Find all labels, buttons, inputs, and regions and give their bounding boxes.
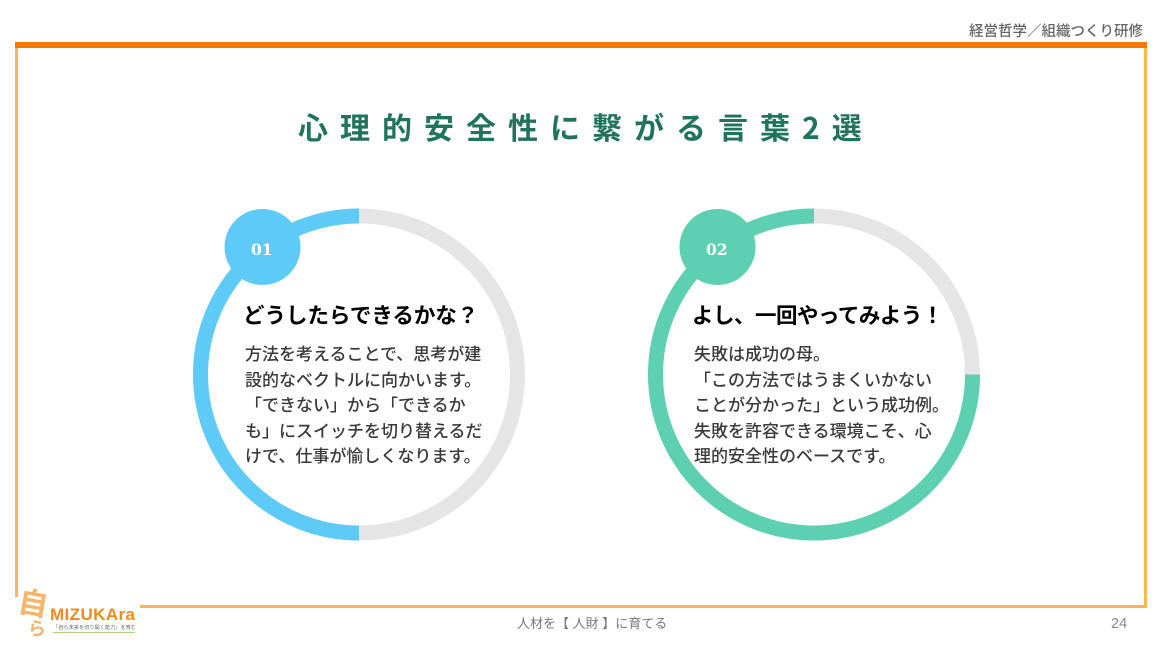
heading 02: よし、一回やってみよう！ [692, 304, 943, 328]
page number: 24 [1111, 616, 1127, 632]
logo [14, 597, 140, 643]
ring chart 01 [193, 208, 525, 540]
body text 01 [245, 345, 482, 466]
logo mark: 自 [15, 586, 51, 623]
number 01: 01 [251, 240, 273, 259]
top orange bar [15, 42, 1147, 48]
heading 01: どうしたらできるかな？ [243, 304, 478, 328]
title: 心理的安全性に繋がる言葉2選 [298, 104, 874, 148]
logo wordmark: MIZUKAra [50, 605, 135, 624]
logo tagline: 「自ら未来を切り開く能力」を育む [53, 625, 135, 631]
body text 02: 失敗を許容できる環境こそ、心 [694, 422, 932, 440]
logo mark tail: ら [28, 619, 46, 639]
body text 02: 理的安全性のベースです。 [694, 447, 895, 466]
body text 02 [694, 345, 949, 466]
number 02: 02 [706, 240, 728, 259]
body text 01: 方法を考えることで、思考が建 [245, 345, 481, 364]
logo tagline [53, 624, 135, 633]
body text 01: 設的なベクトルに向かいます。 [245, 370, 481, 390]
body text 01: 「できない」から「できるか [245, 396, 466, 415]
header label: 経営哲学／組織つくり研修 [969, 20, 1143, 41]
footer slogan: 人材を【 人財 】に育てる [517, 616, 667, 631]
body text 02: 「この方法ではうまくいかない [694, 370, 932, 390]
body text 02: 失敗は成功の母。 [694, 345, 830, 364]
ring chart 02 [648, 208, 980, 540]
body text 02: ことが分かった」という成功例。 [694, 396, 949, 415]
body text 01: も」にスイッチを切り替えるだ [245, 422, 482, 440]
panel: circle 02 [648, 208, 980, 540]
body text 01: けで、仕事が愉しくなります。 [245, 447, 481, 466]
panel: circle 01 [193, 208, 525, 540]
